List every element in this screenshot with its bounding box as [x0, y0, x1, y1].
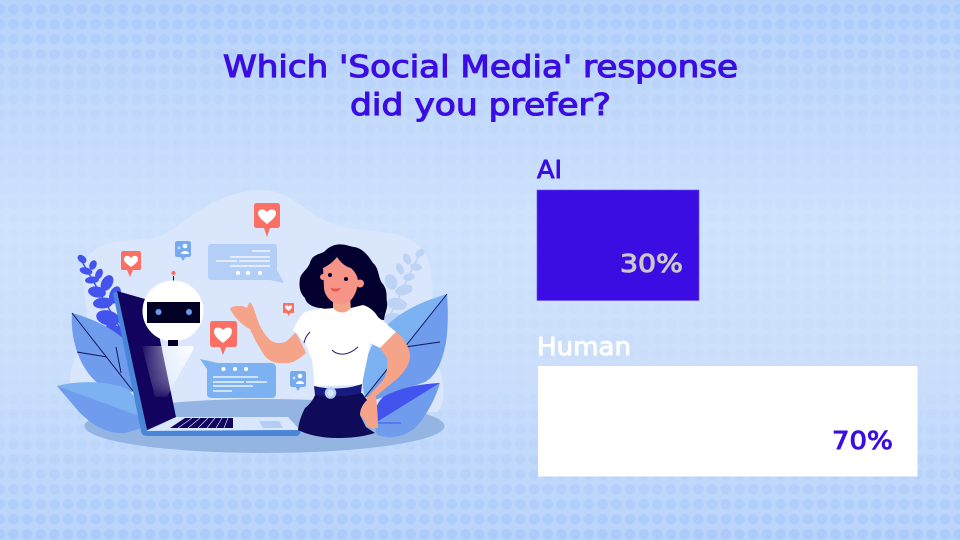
belt: [314, 384, 362, 396]
ground shadow: [84, 399, 444, 453]
label: AI: AI: [537, 155, 562, 184]
laptop screen: [117, 291, 176, 430]
visor: [147, 302, 200, 323]
title: Which 'Social Media' response: [223, 50, 738, 85]
title: did you prefer?: [350, 88, 611, 123]
icon: user bubble bottom: [290, 371, 306, 391]
touchpad: [259, 421, 283, 428]
hologram light cone: [142, 346, 194, 397]
icon: heart bubble center: [210, 321, 237, 355]
value: 30%: 30%: [620, 249, 683, 278]
icon: heart bubble left: [121, 251, 141, 277]
skirt: [298, 393, 375, 438]
antenna: [172, 276, 174, 282]
right fern: [383, 247, 426, 325]
background blob: [70, 190, 444, 425]
hair: [300, 244, 387, 320]
shirt: [293, 305, 396, 386]
title: [223, 50, 738, 123]
bar: AI 30%: [537, 190, 699, 300]
neck: [168, 340, 178, 346]
bar: Human 70%: [538, 366, 918, 476]
left leaves: [57, 313, 146, 433]
woman: [230, 244, 410, 438]
icon: user bubble top: [175, 241, 191, 261]
value: 70%: 70%: [832, 426, 893, 455]
raised arm: [230, 302, 306, 363]
laptop deck: [147, 417, 300, 431]
right leaves: [363, 294, 448, 437]
icon: heart bubble top: [254, 203, 280, 237]
icon: heart bubble tiny: [283, 303, 294, 316]
label: Human: Human: [537, 332, 631, 361]
neck: [333, 296, 351, 315]
robot: [142, 271, 204, 397]
face: [323, 257, 358, 304]
left fern: [76, 253, 126, 343]
arm on hip: [360, 332, 410, 428]
illustration: person and robot chatting at a laptop: [57, 190, 448, 453]
head: [142, 280, 204, 342]
laptop rim: [113, 291, 300, 436]
laptop: [113, 291, 300, 436]
chat bubble bottom: [200, 359, 276, 398]
keyboard: [170, 418, 233, 428]
chat bubble top: [208, 244, 284, 283]
